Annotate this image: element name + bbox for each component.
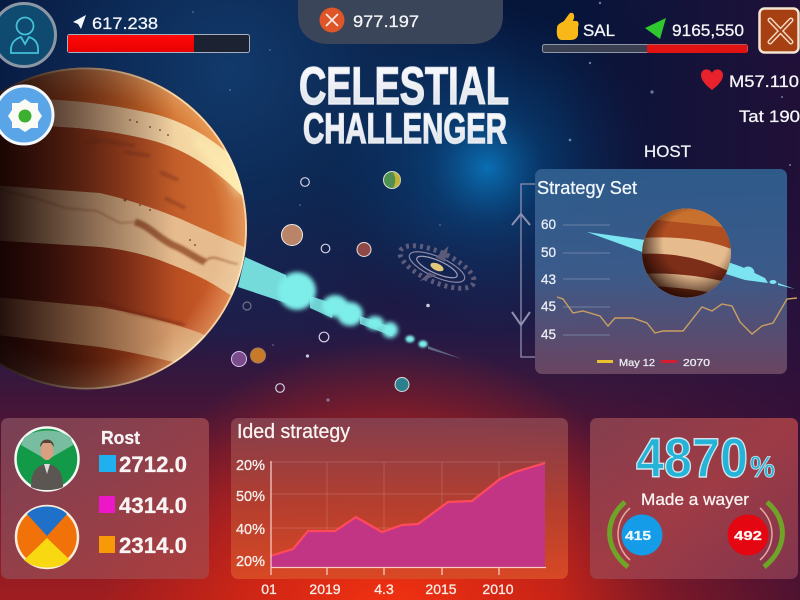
panel: ided strategy area chart xyxy=(231,418,568,597)
settings gear button xyxy=(0,86,53,144)
y-axis labels: 20% xyxy=(236,553,265,570)
title: CHALLENGER xyxy=(303,105,507,153)
line chart xyxy=(557,297,797,334)
legend: 2070 xyxy=(683,357,710,369)
top-left stat with bar xyxy=(68,14,250,52)
planet surface markings xyxy=(37,138,239,328)
x-axis labels: 2010 xyxy=(482,581,514,597)
y-axis labels: 50% xyxy=(236,488,265,505)
panel background xyxy=(590,418,798,579)
heart stat: M57.110 xyxy=(729,72,799,91)
small planets xyxy=(232,172,430,392)
y-axis labels: 40% xyxy=(236,521,265,538)
side scale bracket and arrows xyxy=(512,184,535,357)
side stat: Tat 190 xyxy=(739,107,800,126)
roster rows: 4314.0 xyxy=(119,493,187,518)
x-axis labels xyxy=(261,581,514,597)
axis labels: 50 xyxy=(541,245,556,260)
top-centre score pill xyxy=(298,0,503,44)
panel background xyxy=(1,418,209,579)
comet beam behind small planet xyxy=(587,232,795,289)
axis labels xyxy=(541,217,556,342)
top-right resource stat: 9165,550 xyxy=(672,21,744,40)
panel: strategy set xyxy=(512,169,797,374)
x-axis labels: 01 xyxy=(261,581,277,597)
red gauge xyxy=(728,502,782,567)
axis labels: 45 xyxy=(541,327,556,342)
red gauge: 492 xyxy=(734,528,762,543)
large banded planet xyxy=(0,68,247,390)
avatar button xyxy=(0,4,56,66)
caption: Made a wayer xyxy=(641,490,749,509)
comet beam from large planet xyxy=(238,257,462,359)
roster rows xyxy=(99,452,187,558)
top-right thumbs-up stat xyxy=(557,13,615,40)
area series xyxy=(270,463,545,567)
axis labels: 60 xyxy=(541,217,556,232)
x-axis labels: 4.3 xyxy=(374,581,394,597)
legend xyxy=(597,357,710,369)
blue gauge: 415 xyxy=(625,528,651,543)
spiral galaxy xyxy=(392,229,483,302)
panel heading: Ided strategy xyxy=(237,421,350,443)
roster heading: Rost xyxy=(101,428,140,448)
top-right progress bar xyxy=(542,44,748,53)
host label: HOST xyxy=(644,142,691,161)
orb icon xyxy=(16,506,78,568)
small banded planet xyxy=(640,208,734,300)
top-right resource stat xyxy=(645,18,744,40)
top-right thumbs-up stat: SAL xyxy=(583,21,615,40)
top-left stat with bar: 617.238 xyxy=(92,14,158,33)
title xyxy=(299,57,509,153)
panel heading: Strategy Set xyxy=(537,178,637,198)
x-axis labels: 2015 xyxy=(425,581,457,597)
axes xyxy=(271,461,546,575)
y-axis labels: 20% xyxy=(236,457,265,474)
x-axis labels: 2019 xyxy=(309,581,341,597)
grid xyxy=(271,462,546,568)
panel background xyxy=(535,169,787,374)
big percent value: % xyxy=(750,451,775,484)
legend: May 12 xyxy=(619,357,655,369)
top-centre score pill: 977.197 xyxy=(353,12,419,31)
roster rows: 2712.0 xyxy=(119,452,187,477)
heart stat xyxy=(701,69,799,91)
axis labels: 45 xyxy=(541,299,556,314)
crossed swords button xyxy=(760,8,798,52)
title: CELESTIAL xyxy=(299,57,509,116)
panel: roster xyxy=(1,418,209,579)
y-axis labels xyxy=(236,457,265,570)
big percent value: 4870 xyxy=(636,426,748,489)
roster rows: 2314.0 xyxy=(119,533,187,558)
blue gauge xyxy=(610,502,662,567)
axis labels: 43 xyxy=(541,272,556,287)
panel background xyxy=(231,418,568,579)
panel: wager result xyxy=(590,418,798,579)
portrait avatar xyxy=(16,428,78,490)
